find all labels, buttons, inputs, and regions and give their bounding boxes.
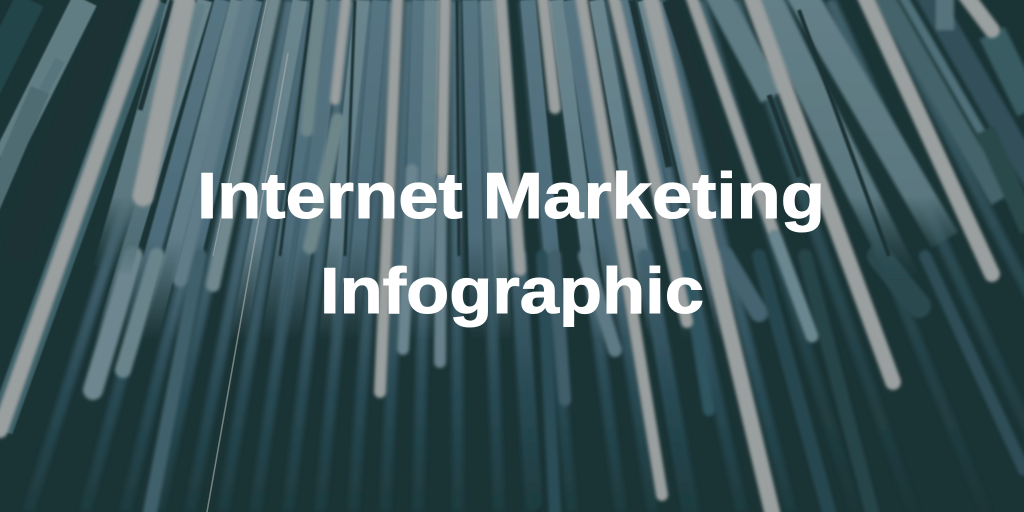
background: thin pale light lines — [207, 0, 288, 512]
title — [197, 159, 825, 327]
background: dense mid-tone streak band — [102, 0, 726, 340]
background: left side streaks — [0, 0, 187, 430]
background: right side streaks — [715, 0, 1024, 280]
background: dark gaps between streaks — [15, 0, 889, 260]
title line 2: Infographic — [320, 254, 704, 327]
title line 1: Internet Marketing — [197, 159, 825, 232]
